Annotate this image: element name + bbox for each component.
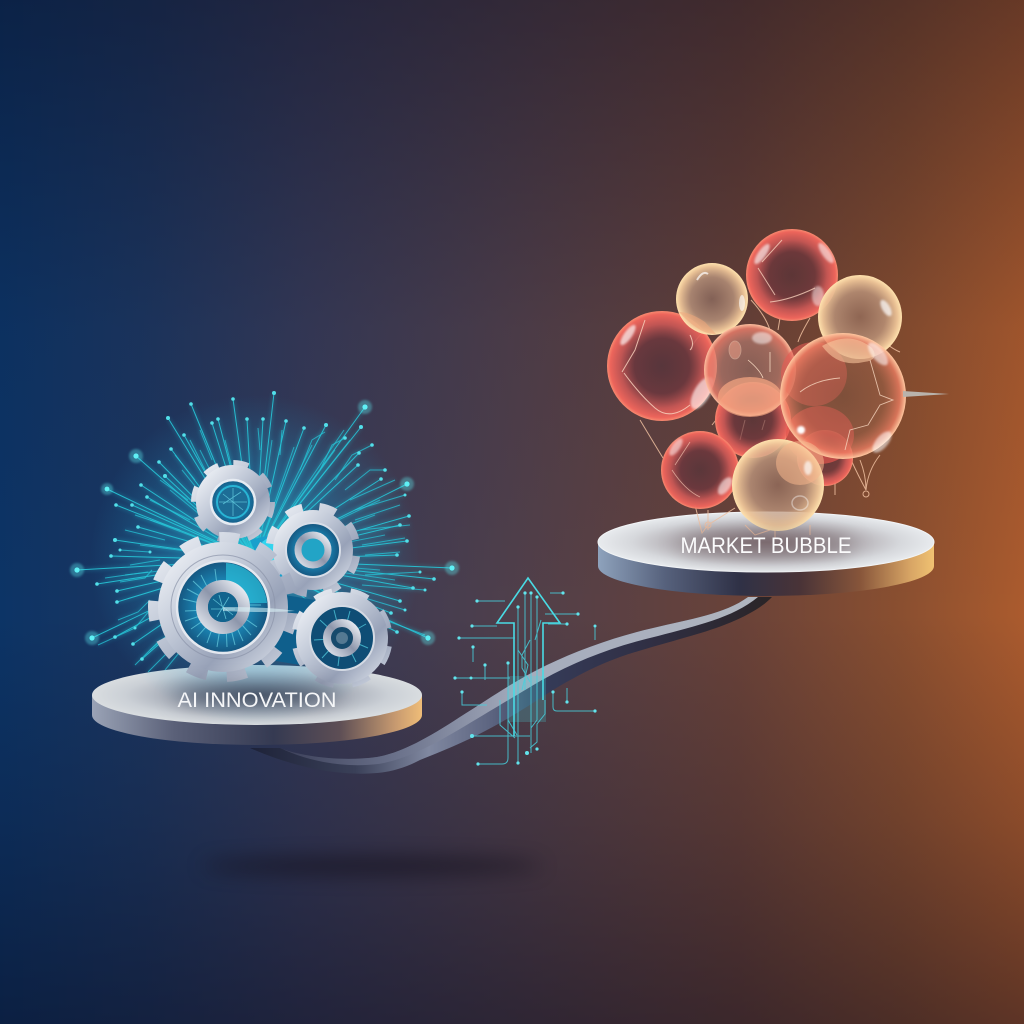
- rising circuit arrow: [453, 578, 597, 766]
- market bubble text shadow: [676, 534, 856, 556]
- label: market bubble: MARKET BUBBLE: [680, 533, 852, 558]
- bubble: cream right: [818, 275, 902, 359]
- bubble: lower left red: [661, 431, 739, 509]
- bubble: large left red: [607, 311, 718, 421]
- bubble: cream bottom: [732, 439, 824, 531]
- bright reflection: [797, 426, 805, 434]
- balloon strings: [640, 300, 900, 538]
- gear: large: [150, 534, 296, 680]
- circuit nodes: [453, 591, 597, 766]
- circuit traces: [455, 593, 595, 764]
- burst glow: [90, 395, 420, 725]
- platform: market bubble: [598, 512, 934, 596]
- label: AI innovation: AI INNOVATION: [178, 689, 336, 712]
- ribbon crossing highlight: [508, 676, 546, 722]
- bright nodes: [70, 400, 459, 645]
- floor shadow: [202, 858, 542, 874]
- bubble: centre pink: [704, 324, 796, 416]
- bubble: red inner lower: [786, 406, 854, 464]
- burst nodes: [95, 391, 436, 662]
- bubble cluster: [607, 229, 906, 531]
- burst lines: [77, 393, 452, 672]
- AI data burst: [70, 391, 459, 725]
- bubble: cream upper left: [676, 263, 748, 335]
- bubble: top red: [746, 229, 838, 321]
- bubble: lower middle red: [715, 382, 791, 458]
- arrow outline: [497, 578, 560, 736]
- bubble: red inner upper: [781, 342, 847, 406]
- gear: top: [197, 466, 269, 538]
- bubble: rear lower red: [797, 430, 853, 486]
- burst line haze: [77, 393, 452, 672]
- gear: right: [267, 504, 359, 596]
- bubble: peach inner lens: [718, 377, 782, 417]
- needle: [903, 391, 949, 397]
- cyan gaps between gears: [250, 530, 315, 665]
- bubble: large right: [780, 333, 906, 459]
- connecting ribbon: [250, 597, 772, 774]
- AI innovation text shadow: [172, 685, 342, 707]
- gear: lower right: [291, 587, 393, 689]
- platform: AI innovation: [92, 665, 422, 745]
